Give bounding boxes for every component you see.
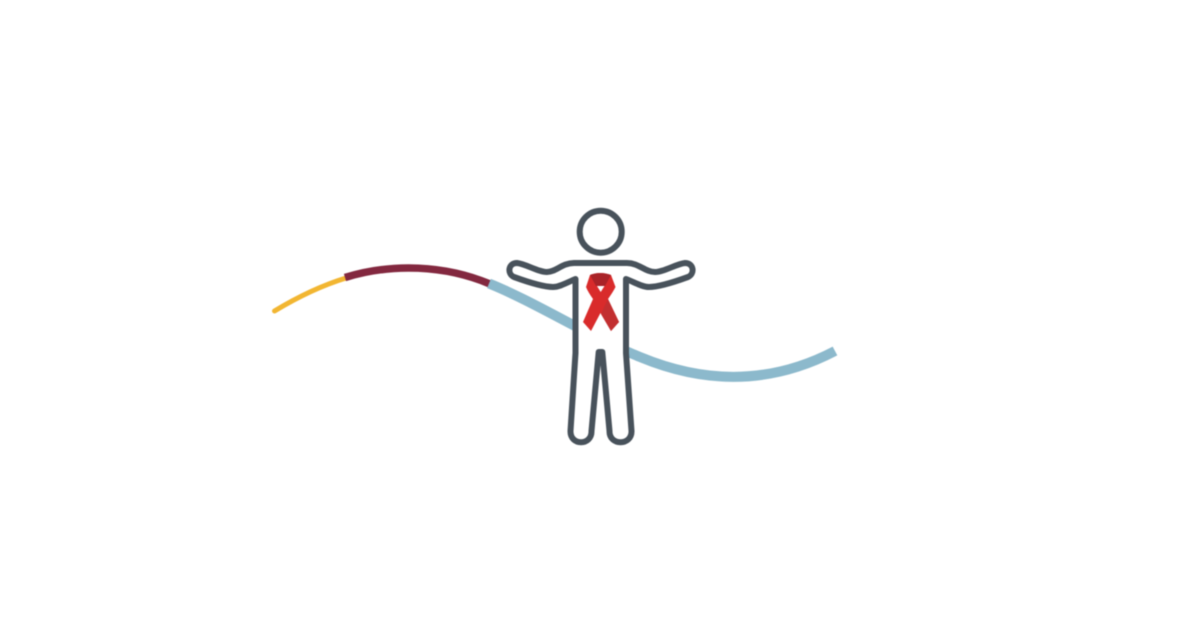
ribbon silhouette — [583, 273, 619, 331]
wave segment: maroon — [345, 268, 490, 284]
ribbon loop back — [590, 273, 611, 286]
ribbon loop hole — [597, 286, 604, 292]
icon: red awareness ribbon — [583, 273, 619, 331]
ribbon right leg shade — [601, 299, 619, 331]
wave segment: yellow — [274, 278, 346, 311]
person head — [580, 211, 622, 253]
wave curve — [274, 268, 835, 377]
person body outline — [509, 263, 693, 442]
wave segment: light blue — [489, 284, 835, 377]
person icon — [509, 211, 693, 442]
